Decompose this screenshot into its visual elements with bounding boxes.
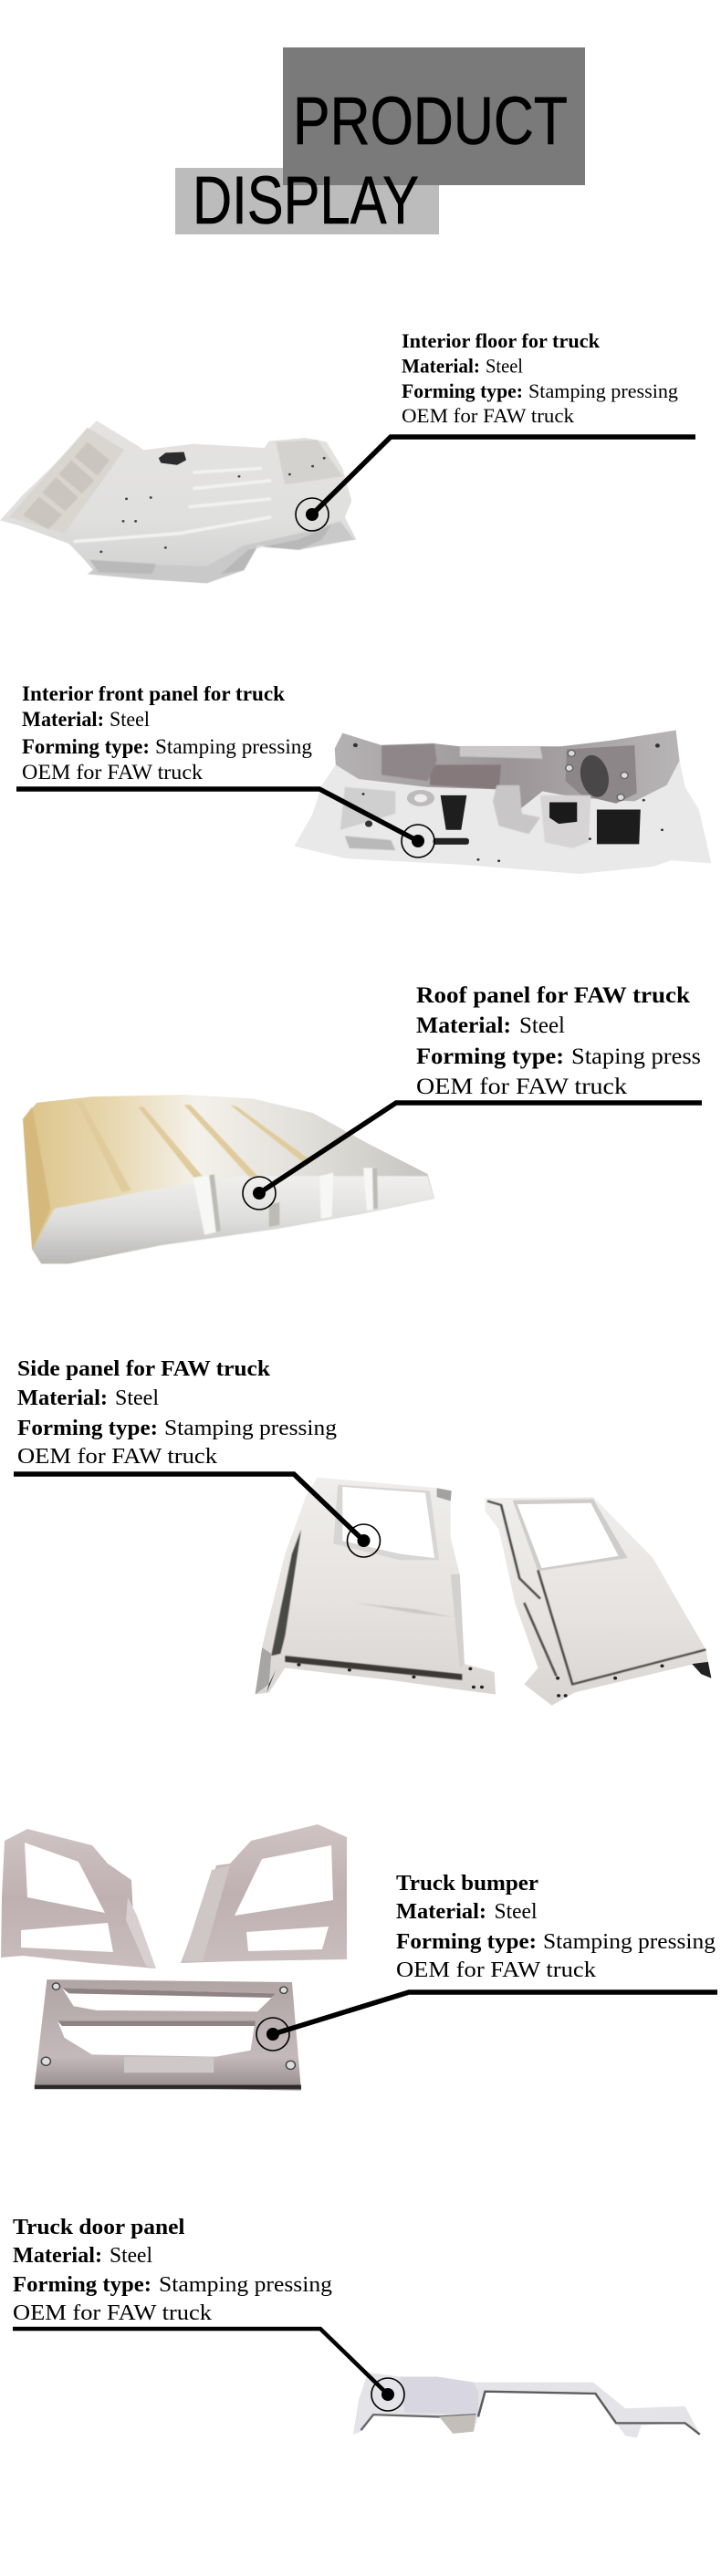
callout leader: truck door panel	[13, 2329, 404, 2411]
heading word: display: DISPLAY	[193, 162, 419, 238]
callout text: roof panel: Roof panel for FAW truck	[416, 983, 690, 1008]
side panel left	[256, 1478, 496, 1695]
product photo: roof panel	[23, 1095, 434, 1263]
product photo: side panels	[256, 1478, 711, 1706]
callout text: truck bumper: Forming type:	[396, 1930, 537, 1954]
callout text: side panel: Forming type:	[17, 1417, 158, 1440]
callout leader: roof panel	[243, 1103, 702, 1210]
callout text: truck bumper	[396, 1872, 716, 1982]
callout text: roof panel: Material:	[416, 1013, 511, 1038]
callout text: side panel	[17, 1357, 337, 1469]
product photo: interior floor	[0, 421, 356, 583]
callout text: truck bumper: Material:	[396, 1900, 486, 1924]
callout text: truck door panel: Truck door panel	[13, 2216, 185, 2239]
callout text: interior floor: Material:	[402, 354, 480, 378]
callout text: interior floor: Steel	[486, 354, 523, 378]
callout text: interior front panel: Material:	[22, 708, 104, 731]
callout text: truck bumper: Stamping pressing	[543, 1930, 716, 1954]
callout leader: interior floor	[296, 437, 695, 531]
callout leader: side panel	[14, 1474, 380, 1557]
callout text: interior front panel: Stamping pressing	[155, 735, 312, 758]
callout text: interior front panel	[22, 682, 312, 784]
heading tag: product background	[283, 47, 585, 185]
callout text: interior floor	[402, 329, 678, 427]
callout text: interior floor: Forming type:	[402, 379, 523, 402]
callout text: truck bumper: OEM for FAW truck	[396, 1958, 596, 1982]
bumper wing right	[181, 1824, 347, 1963]
callout text: side panel: Material:	[17, 1387, 108, 1410]
callout text: interior floor: Interior floor for truck	[402, 329, 601, 352]
callout text: roof panel	[416, 983, 701, 1099]
callout text: truck door panel: Forming type:	[13, 2273, 152, 2297]
heading word: product: PRODUCT	[293, 83, 568, 159]
callout text: roof panel: Staping press	[571, 1044, 701, 1069]
callout leader: interior front panel	[16, 789, 434, 857]
callout text: roof panel: Forming type:	[416, 1044, 564, 1069]
callout text: truck bumper: Truck bumper	[396, 1872, 538, 1896]
callout text: interior front panel: OEM for FAW truck	[22, 761, 204, 784]
product photo: truck bumper	[1, 1824, 347, 2091]
callout text: truck door panel: OEM for FAW truck	[13, 2301, 212, 2325]
callout text: truck door panel: Stamping pressing	[159, 2273, 332, 2297]
callout text: side panel: Side panel for FAW truck	[17, 1357, 271, 1381]
callout text: truck door panel	[13, 2216, 332, 2325]
heading: product display	[175, 47, 585, 238]
callout text: truck bumper: Steel	[495, 1900, 538, 1924]
side panel right	[486, 1497, 711, 1706]
callout text: side panel: Stamping pressing	[164, 1417, 337, 1440]
callout text: interior floor: Stamping pressing	[528, 379, 678, 402]
callout text: truck door panel: Material:	[13, 2244, 102, 2268]
callout text: interior front panel: Interior front panel for truck	[22, 682, 285, 705]
callout text: interior floor: OEM for FAW truck	[402, 404, 574, 427]
heading tag: display background	[175, 168, 439, 234]
callout text: interior front panel: Steel	[110, 708, 150, 731]
product photo: interior front panel	[294, 730, 711, 874]
bumper main plate	[35, 1979, 301, 2091]
callout text: roof panel: OEM for FAW truck	[416, 1075, 628, 1099]
callout text: side panel: OEM for FAW truck	[17, 1445, 217, 1469]
callout text: roof panel: Steel	[519, 1013, 565, 1038]
callout text: interior front panel: Forming type:	[22, 735, 150, 758]
callout leader: truck bumper	[256, 1992, 717, 2051]
bumper wing left	[1, 1829, 156, 1968]
callout text: side panel: Steel	[115, 1387, 159, 1410]
product photo: truck door panel	[353, 2373, 700, 2438]
callout text: truck door panel: Steel	[110, 2244, 152, 2268]
